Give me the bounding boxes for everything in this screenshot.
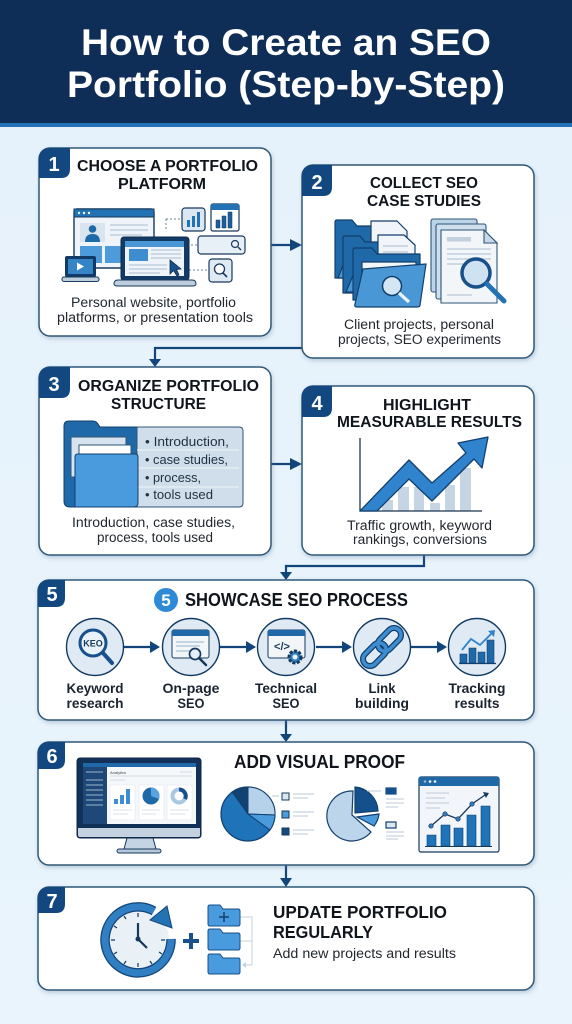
- step number 3: [39, 367, 70, 398]
- icon: keyword research: [66, 618, 124, 676]
- step labels: results: [454, 695, 500, 711]
- step number 2: [302, 165, 332, 196]
- icon: keyword research: KEO: [83, 638, 103, 648]
- panel: step 1 choose a portfolio platform: [39, 148, 271, 336]
- chart: pie one with legend: [221, 787, 314, 841]
- description: Personal website, portfolio: [71, 295, 236, 310]
- step number 2: 2: [311, 172, 323, 194]
- step number 3: 3: [48, 374, 60, 396]
- step number 6: 6: [46, 746, 58, 768]
- heading: [337, 397, 522, 431]
- heading: CHOOSE A PORTFOLIO: [77, 158, 258, 175]
- step number 6: [38, 742, 65, 769]
- heading and description: Add new projects and results: [273, 946, 456, 961]
- heading: STRUCTURE: [111, 396, 206, 413]
- panel: step 7 update portfolio regularly: [38, 887, 534, 990]
- heading: [77, 158, 258, 193]
- icon: dashboard monitor: Analytics: [110, 770, 126, 775]
- heading: COLLECT SEO: [370, 175, 478, 192]
- description: Client projects, personal: [344, 317, 494, 332]
- panel: step 4 highlight measurable results: [302, 386, 534, 555]
- step number 4: 4: [311, 393, 323, 415]
- icon: documents with magnifier: [431, 219, 504, 303]
- heading and description: REGULARLY: [273, 922, 373, 942]
- step number 4: [302, 386, 332, 417]
- heading and description: UPDATE PORTFOLIO: [273, 902, 447, 922]
- step labels: SEO: [272, 695, 300, 711]
- step number 1: 1: [48, 154, 60, 176]
- list text: • tools used: [145, 488, 213, 502]
- step labels: SEO: [178, 695, 205, 711]
- heading: MEASURABLE RESULTS: [337, 414, 522, 431]
- step labels: Keyword: [66, 680, 124, 696]
- step labels: [66, 680, 506, 711]
- panel: step 3 organize portfolio structure: [39, 367, 271, 555]
- heading: SHOWCASE SEO PROCESS: [185, 590, 408, 610]
- icon: dashboard monitor: [77, 758, 201, 853]
- list text: • Introduction,: [145, 435, 229, 449]
- step labels: Tracking: [448, 680, 506, 696]
- heading: 5: [161, 591, 171, 610]
- step labels: Technical: [255, 680, 317, 696]
- description: [57, 295, 253, 325]
- heading: [78, 378, 259, 413]
- step number 5: [38, 580, 65, 607]
- header banner: [0, 0, 572, 127]
- step labels: On-page: [162, 680, 220, 696]
- chart: browser with bars and trend line: [419, 777, 499, 852]
- heading: [154, 588, 408, 612]
- description: [72, 515, 235, 545]
- panel: step 5 showcase seo process: [38, 580, 534, 720]
- panel: step 2 collect seo case studies: [302, 165, 534, 358]
- step labels: Link: [368, 680, 396, 696]
- heading: CASE STUDIES: [367, 193, 481, 210]
- description: Traffic growth, keyword: [347, 518, 492, 533]
- description: [338, 317, 501, 347]
- description: platforms, or presentation tools: [57, 310, 253, 325]
- description: projects, SEO experiments: [338, 332, 501, 347]
- step number 7: [38, 887, 65, 913]
- step number 7: 7: [46, 891, 58, 913]
- step labels: research: [66, 695, 124, 711]
- step number 1: [39, 148, 70, 178]
- list text: • case studies,: [145, 453, 228, 467]
- step labels: building: [355, 695, 409, 711]
- description: rankings, conversions: [353, 532, 487, 547]
- list text: • process,: [145, 471, 201, 485]
- icon: on-page seo: [162, 618, 220, 676]
- heading: [367, 175, 481, 210]
- icon: plus sign: [183, 933, 199, 949]
- heading and description: [273, 902, 456, 961]
- description: Introduction, case studies,: [72, 515, 235, 530]
- icon: clock with refresh arrow: [105, 906, 172, 973]
- icon: link building: [354, 618, 410, 676]
- heading: ORGANIZE PORTFOLIO: [78, 378, 259, 395]
- connectors between steps: [149, 239, 424, 887]
- process arrows: [124, 641, 447, 653]
- icon: technical seo: </>: [274, 641, 290, 653]
- title: Portfolio (Step-by-Step): [67, 64, 505, 105]
- title: How to Create an SEO: [81, 22, 491, 63]
- icon: folders with magnifier: [335, 220, 426, 307]
- panel: step 6 add visual proof: [38, 742, 534, 865]
- step number 5: 5: [46, 584, 58, 606]
- list text: [145, 435, 229, 502]
- chart: pie two with legend: [327, 787, 404, 841]
- title: [67, 22, 505, 105]
- icon: stacked folders: [208, 905, 252, 974]
- icon: technical seo: [258, 618, 314, 676]
- icon: devices and widgets: [62, 204, 245, 286]
- icon: tracking results: [448, 618, 506, 676]
- icon: folder with list: [64, 421, 243, 507]
- heading: PLATFORM: [118, 176, 206, 193]
- heading: HIGHLIGHT: [383, 397, 472, 414]
- description: process, tools used: [97, 530, 213, 545]
- heading: ADD VISUAL PROOF: [234, 752, 405, 772]
- description: [347, 518, 492, 547]
- chart: growth arrow over bars: [360, 437, 488, 511]
